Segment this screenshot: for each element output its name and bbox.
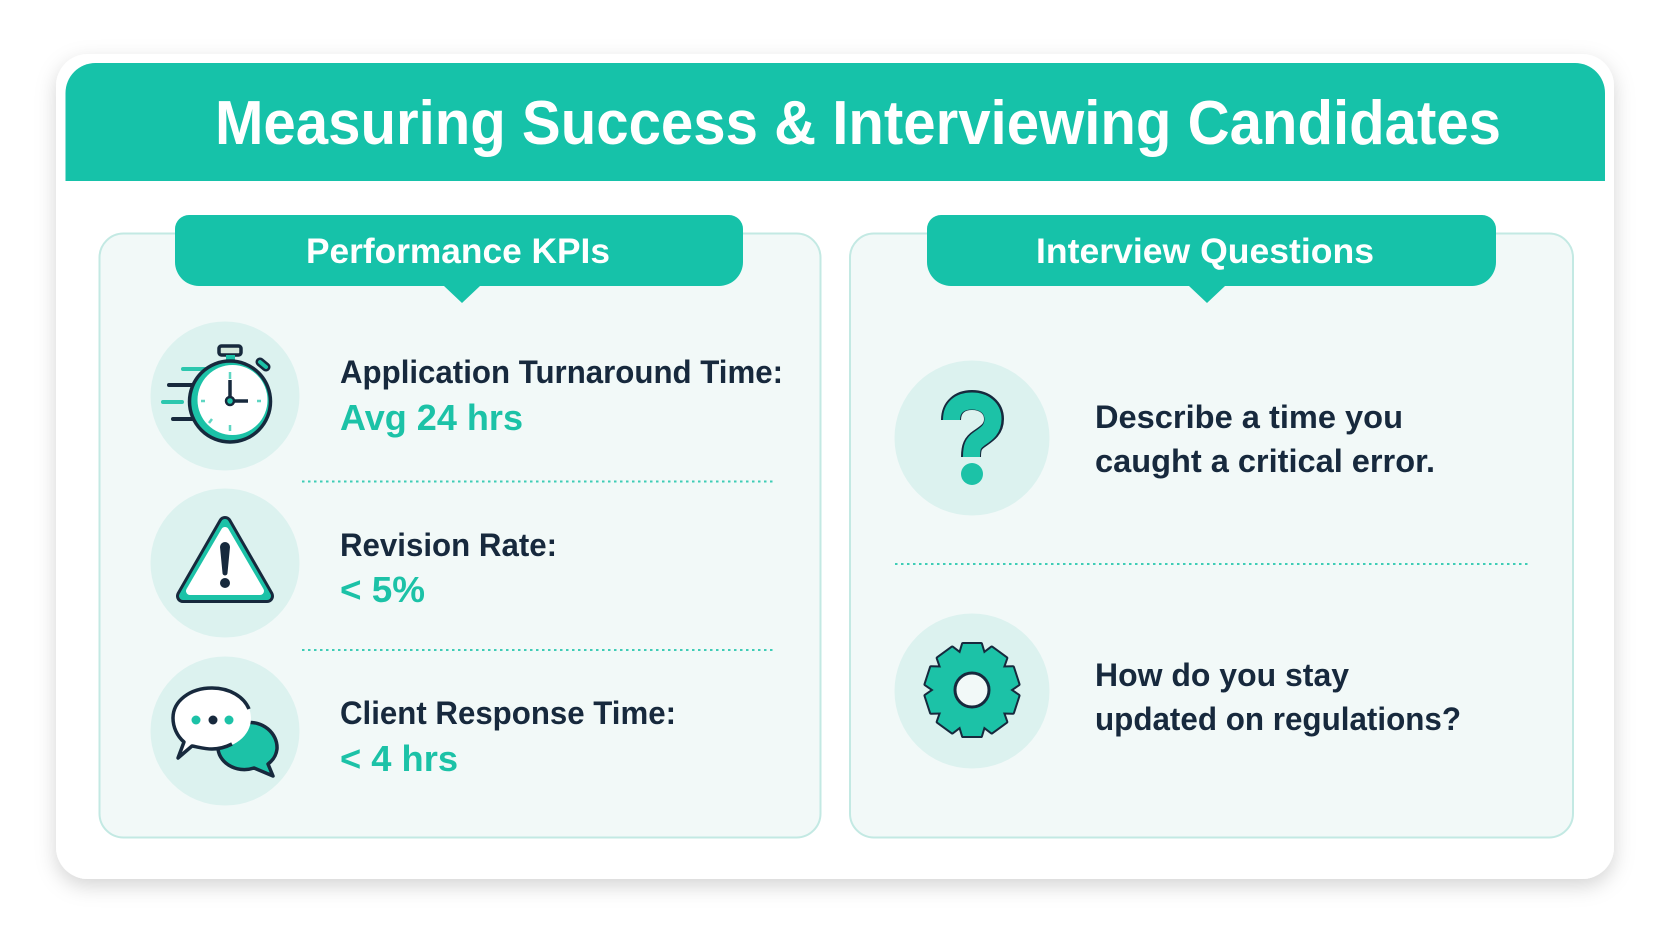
KPI text: client response time: Client Response Time:	[340, 695, 676, 731]
icon: question mark	[894, 360, 1050, 516]
question text: critical error: Describe a time you	[1095, 399, 1403, 435]
KPI text: client response time	[340, 695, 676, 779]
question text: regulations: updated on regulations?	[1095, 701, 1461, 737]
heading: performance KPIs: Performance KPIs	[306, 232, 610, 271]
question text: critical error: caught a critical error.	[1095, 443, 1435, 479]
heading: interview questions	[927, 215, 1496, 303]
KPI text: revision rate	[340, 527, 557, 610]
KPI text: client response time: < 4 hrs	[340, 738, 458, 779]
KPI text: application turnaround time: Avg 24 hrs	[340, 397, 523, 438]
question text: regulations: How do you stay	[1095, 657, 1349, 693]
question text: regulations	[1095, 657, 1461, 737]
KPI text: revision rate: < 5%	[340, 569, 425, 610]
heading: interview questions: Interview Questions	[1036, 232, 1374, 271]
panel: interview questions	[850, 215, 1573, 838]
icon: gear	[894, 614, 1050, 768]
title: Measuring Success & Interviewing Candidates	[215, 89, 1501, 158]
panel: performance KPIs	[100, 215, 820, 838]
icon: chat bubbles	[150, 656, 300, 806]
icon: stopwatch	[150, 322, 300, 470]
question text: critical error	[1095, 399, 1435, 479]
title banner	[66, 63, 1605, 181]
KPI text: application turnaround time: Application Turnaround Time:	[340, 354, 783, 390]
KPI text: revision rate: Revision Rate:	[340, 527, 557, 563]
icon: warning triangle	[150, 488, 300, 638]
heading: performance KPIs	[175, 215, 743, 303]
KPI text: application turnaround time	[340, 354, 783, 438]
